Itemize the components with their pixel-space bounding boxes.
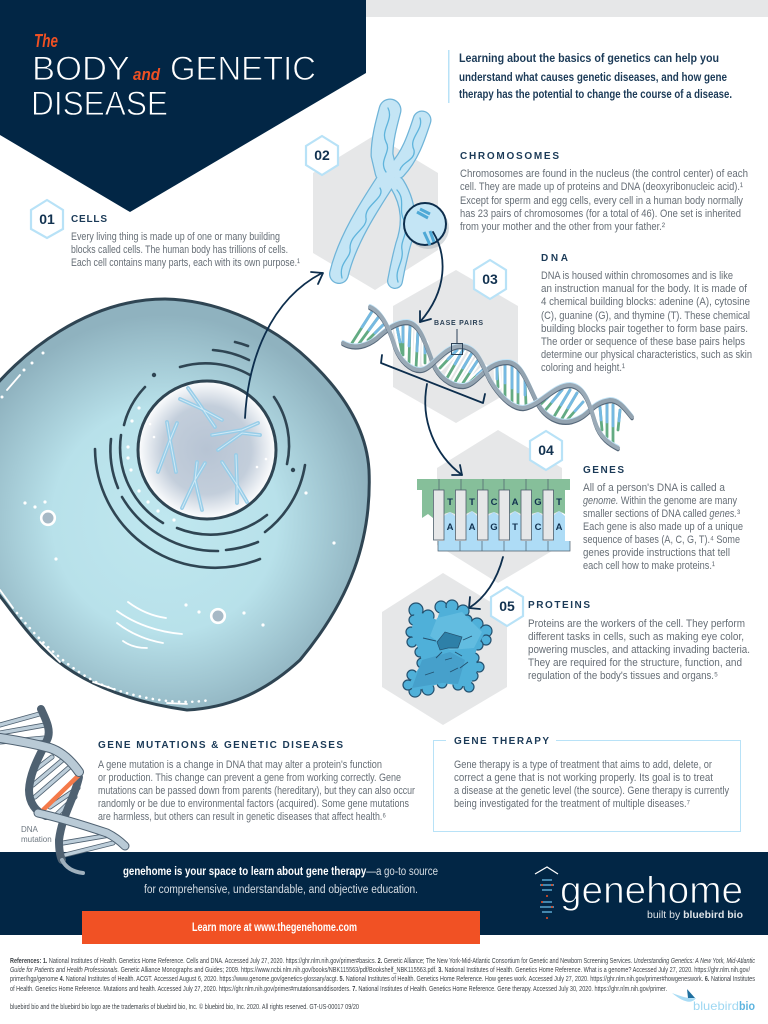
illustration: gene base pairs: T [512, 522, 518, 533]
gene therapy text [454, 759, 729, 810]
panel: gene mutations and genetic diseases [98, 740, 415, 823]
illustration: gene base pairs: T [556, 497, 562, 508]
nuclear membrane arcs [95, 342, 305, 568]
panel: proteins [403, 587, 750, 697]
panel: genes [417, 431, 743, 572]
genes text: All of a person's DNA is called a [583, 482, 726, 494]
call to action button: Learn more at www.thegenehome.com [192, 922, 357, 934]
bluebird bio logo: bluebird [693, 999, 739, 1013]
illustration: DNA helix [343, 306, 632, 450]
cells text [71, 231, 300, 269]
illustration: DNA mutation [0, 709, 125, 873]
mutations heading: GENE MUTATIONS & GENETIC DISEASES [98, 740, 343, 751]
proteins text: They are required for the structure, function, and [528, 657, 742, 669]
footer message [123, 866, 438, 896]
organelles [23, 406, 336, 648]
call to action button [82, 911, 480, 944]
DNA heading: DNA [541, 253, 568, 264]
footer message: genehome is your space to learn about gene therapy—a go-to source [123, 866, 438, 878]
header banner with title: DISEASE [31, 85, 168, 123]
genehome logo: built by bluebird bio [647, 909, 743, 921]
intro statement: Learning about the basics of genetics can help you [459, 51, 719, 65]
proteins text: regulation of the body's tissues and organs.⁵ [528, 670, 718, 682]
arrow: DNA to genes [425, 384, 462, 475]
DNA text: coloring and height.¹ [541, 362, 625, 374]
header banner with title: and [133, 65, 161, 84]
cells text: Every living thing is made up of one or many building [71, 231, 280, 243]
intro statement [448, 50, 732, 103]
mutations text: are harmless, but others can result in genetic diseases that affect health.⁶ [98, 811, 386, 823]
gene therapy text: being investigated for the treatment of multiple diseases.⁷ [454, 798, 690, 810]
genes heading: GENES [583, 465, 624, 476]
cells heading: CELLS [71, 214, 107, 225]
top right strip [366, 0, 768, 17]
arrow: genes to proteins [469, 557, 503, 609]
genes text: genes provide instructions that tell [583, 547, 730, 559]
base pairs callout: BASE PAIRS [434, 320, 483, 327]
chromosomes text: from your mother and the other from your father.² [460, 221, 665, 233]
badge 05: 05 [499, 598, 515, 614]
illustration: gene base pairs: G [490, 522, 498, 533]
cells text: Each cell contains many parts, each with its own purpose.¹ [71, 257, 300, 269]
bluebird bio logo: bio [739, 999, 755, 1013]
proteins heading: PROTEINS [528, 600, 590, 611]
gene therapy text: Gene therapy is a type of treatment that aims to add, delete, or [454, 759, 712, 771]
header banner with title [0, 0, 366, 212]
badge 05 [491, 587, 523, 626]
illustration: gene base pairs: C [535, 522, 542, 533]
icon: genehome DNA house [535, 867, 558, 919]
panel: cells [31, 200, 300, 269]
cell body [0, 299, 369, 710]
references: of Health. Genetics Home Reference. Mutations and health. Accessed July 27, 2020. https://ghr.nlm.nih.gov/primer#mutationsanddisorders. 7. National Institutes of Health. Genetics Home Reference. Gene therapy. Accessed July 30, 2020. https://ghr.nlm.nih.gov/primer. [10, 984, 667, 993]
genes text [583, 482, 743, 572]
header banner with title: The [34, 31, 58, 51]
white membrane dots [0, 352, 210, 704]
genehome logo: genehome [560, 870, 743, 912]
panel: gene therapy [434, 736, 740, 832]
references [10, 956, 755, 1011]
illustration: gene base pairs: A [556, 522, 563, 533]
badge 03 [474, 260, 506, 299]
illustration: chromosome [339, 108, 422, 282]
hexagon backdrops [313, 135, 562, 725]
genes text: genome. Within the genome are many [583, 495, 737, 507]
illustration: gene base pairs [417, 479, 570, 551]
illustration: gene base pairs: A [512, 497, 519, 508]
genes text: each cell how to make proteins.¹ [583, 560, 715, 572]
gene therapy heading: GENE THERAPY [454, 736, 549, 747]
badge 04 [530, 431, 562, 470]
badge 02: 02 [314, 147, 330, 163]
illustration: gene base pairs: T [469, 497, 475, 508]
arrow: chromosome to DNA [420, 232, 443, 322]
proteins text [528, 618, 750, 682]
illustration: gene base pairs: A [447, 522, 454, 533]
bluebird bio logo [672, 989, 755, 1013]
arrow: nucleus to chromosome [245, 272, 323, 418]
illustration: gene base pairs: G [534, 497, 542, 508]
bracket [381, 355, 485, 403]
badge 03: 03 [482, 271, 498, 287]
zoom circle [404, 203, 449, 249]
footer message: for comprehensive, understandable, and objective education. [144, 884, 418, 896]
genes text: smaller sections of DNA called genes.³ [583, 508, 740, 520]
mutations text: A gene mutation is a change in DNA that may alter a protein's function [98, 759, 382, 771]
base pairs callout [434, 320, 483, 354]
illustration: protein [403, 600, 492, 697]
chromosomes heading: CHROMOSOMES [460, 151, 559, 162]
gene therapy text: correct a gene that is not working properly. Its goal is to treat [454, 772, 714, 784]
DNA mutation label: DNA [21, 825, 39, 834]
DNA text [541, 270, 752, 374]
mutations text: mutations can be passed down from parents (hereditary), but they can also occur [98, 785, 415, 797]
DNA mutation label: mutation [21, 835, 52, 844]
mutations text: randomly or be due to environmental factors (acquired). Some gene mutations [98, 798, 409, 810]
illustration: cell [0, 299, 369, 710]
chromosomes in nucleus [158, 388, 260, 510]
mutations text: or production. This change can prevent a gene from working correctly. Gene [98, 772, 401, 784]
mutations text [98, 759, 415, 823]
footer band [0, 852, 768, 944]
header banner with title: BODY [32, 50, 130, 88]
proteins text: different tasks in cells, such as making eye color, [528, 631, 744, 643]
panel: chromosomes [306, 108, 748, 282]
cells text: blocks called cells. The human body has trillions of cells. [71, 244, 288, 256]
references: bluebird bio and the bluebird bio logo are the trademarks of bluebird bio, Inc. © bluebird bio, Inc. 2020. All rights reserved. GT-US-00017 09/20 [10, 1002, 359, 1011]
header banner with title: GENETIC [170, 50, 316, 88]
badge 01 [31, 200, 63, 238]
illustration: gene base pairs: T [447, 497, 453, 508]
proteins text: Proteins are the workers of the cell. They perform [528, 618, 745, 630]
DNA mutation label [21, 825, 52, 844]
illustration: gene base pairs: C [491, 497, 498, 508]
chromosomes text [460, 168, 748, 233]
illustration: gene base pairs: A [469, 522, 476, 533]
badge 02 [306, 136, 338, 175]
badge 04: 04 [538, 442, 554, 458]
nucleus [138, 381, 276, 519]
panel: DNA [343, 253, 752, 450]
badge 01: 01 [39, 211, 55, 227]
